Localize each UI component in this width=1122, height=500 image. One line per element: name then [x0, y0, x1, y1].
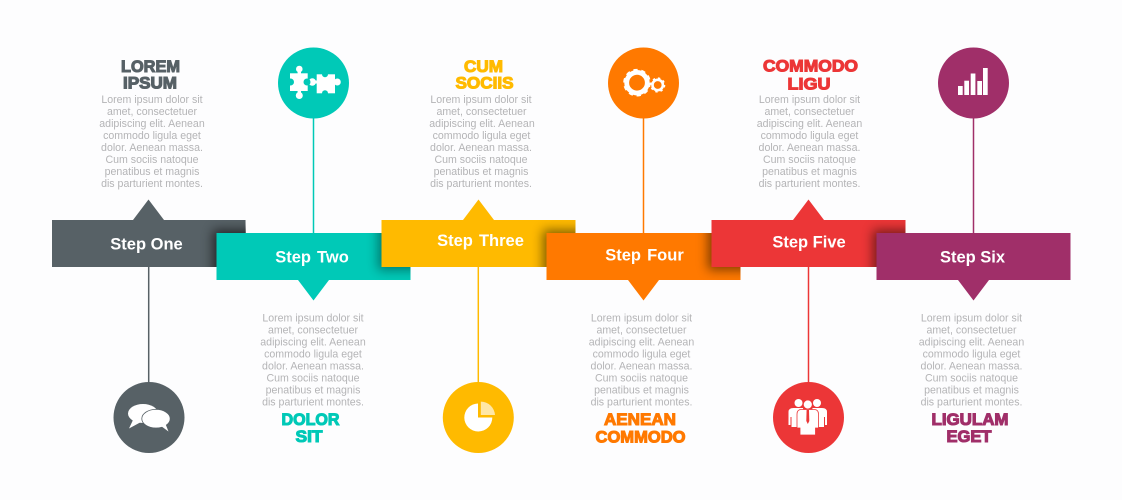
text block: cum sociis: dolor. Aenean massa. [430, 142, 532, 154]
text block: dolor sit: Lorem ipsum dolor sit [262, 312, 364, 324]
text block: lorem ipsum: commodo ligula eget [103, 130, 201, 142]
icon: team of people [773, 382, 844, 453]
text block: lorem ipsum [99, 57, 205, 190]
text block: cum sociis: Lorem ipsum dolor sit [430, 94, 532, 106]
text block: dolor sit: amet, consectetuer [268, 324, 359, 336]
text block: ligulam eget: EGET [946, 427, 992, 446]
icon: speech bubbles [114, 382, 184, 453]
text block: commodo ligu: COMMODO [763, 56, 858, 76]
text block: lorem ipsum: Cum sociis natoque [105, 154, 199, 166]
text block: cum sociis: commodo ligula eget [433, 130, 530, 142]
icon: pie chart [443, 382, 514, 453]
banner: step four: Step Four [605, 246, 684, 264]
icon: bar chart [938, 48, 1009, 118]
text block: lorem ipsum: amet, consectetuer [107, 106, 198, 118]
text block: dolor sit: penatibus et magnis [266, 384, 360, 396]
icon: puzzle pieces [278, 48, 349, 118]
text block: cum sociis: CUM [464, 57, 503, 76]
text block: ligulam eget: dis parturient montes. [921, 396, 1022, 408]
text block: cum sociis: amet, consectetuer [436, 106, 527, 118]
connector line: step three [477, 262, 479, 385]
text block: dolor sit: DOLOR [282, 410, 340, 429]
text block: dolor sit: Cum sociis natoque [266, 372, 360, 384]
banner: step two: Step Two [275, 248, 349, 266]
text block: dolor sit [260, 312, 366, 446]
banner: step six [876, 233, 1070, 300]
text block: ligulam eget: amet, consectetuer [926, 324, 1017, 336]
text block: lorem ipsum: Lorem ipsum dolor sit [101, 94, 203, 106]
text block: ligulam eget: adipiscing elit. Aenean [919, 336, 1024, 348]
text block: lorem ipsum: dolor. Aenean massa. [101, 142, 203, 154]
connector line: step six [972, 115, 974, 236]
text block: dolor sit: SIT [296, 427, 323, 446]
text block: commodo ligu: amet, consectetuer [764, 106, 855, 118]
connector line: step one [148, 262, 150, 385]
text block: cum sociis: Cum sociis natoque [434, 154, 528, 166]
text block: cum sociis: dis parturient montes. [430, 178, 532, 190]
text block: commodo ligu [757, 56, 862, 190]
text block: dolor sit: adipiscing elit. Aenean [260, 336, 366, 348]
banner: step three [382, 200, 576, 267]
text block: commodo ligu: commodo ligula eget [761, 130, 858, 142]
text block: cum sociis: penatibus et magnis [434, 166, 528, 178]
text block: aenean commodo: dolor. Aenean massa. [591, 360, 692, 372]
text block: dolor sit: commodo ligula eget [264, 348, 362, 360]
text block: dolor sit: dis parturient montes. [262, 396, 364, 408]
text block: commodo ligu: adipiscing elit. Aenean [757, 118, 862, 130]
text block: ligulam eget: dolor. Aenean massa. [921, 360, 1022, 372]
banner: step six: Step Six [940, 248, 1006, 266]
banner: step one [52, 200, 246, 267]
connector line: step five [808, 262, 810, 385]
text block: ligulam eget: Cum sociis natoque [925, 372, 1018, 384]
text block: commodo ligu: Lorem ipsum dolor sit [759, 94, 860, 106]
text block: lorem ipsum: IPSUM [123, 74, 177, 92]
text block: commodo ligu: Cum sociis natoque [763, 154, 856, 166]
text block: aenean commodo: Cum sociis natoque [595, 372, 688, 384]
connector line: step four [642, 115, 644, 236]
connector line: step two [312, 115, 314, 236]
banner: step three: Step Three [437, 232, 524, 250]
text block: dolor sit: dolor. Aenean massa. [262, 360, 364, 372]
text block: aenean commodo: adipiscing elit. Aenean [589, 336, 694, 348]
text block: cum sociis: adipiscing elit. Aenean [429, 118, 535, 130]
text block: aenean commodo: commodo ligula eget [593, 348, 690, 360]
banner: step two [216, 233, 410, 300]
banner: step five: Step Five [772, 234, 846, 252]
text block: ligulam eget: Lorem ipsum dolor sit [921, 312, 1022, 324]
text block: cum sociis [429, 57, 535, 190]
text block: aenean commodo: Lorem ipsum dolor sit [591, 312, 692, 324]
text block: ligulam eget: LIGULAM [932, 410, 1008, 429]
text block: cum sociis: SOCIIS [456, 74, 514, 92]
text block: aenean commodo: AENEAN [604, 410, 676, 429]
text block: ligulam eget: commodo ligula eget [923, 348, 1020, 360]
text block: aenean commodo [589, 312, 694, 446]
text block: commodo ligu: penatibus et magnis [762, 166, 857, 178]
banner: step four [546, 233, 740, 300]
text block: ligulam eget: penatibus et magnis [924, 384, 1019, 396]
icon: gears [608, 48, 679, 118]
text block: lorem ipsum: adipiscing elit. Aenean [99, 118, 205, 130]
banner: step five [712, 200, 906, 267]
text block: aenean commodo: COMMODO [596, 428, 686, 446]
text block: aenean commodo: dis parturient montes. [591, 396, 692, 408]
text block: lorem ipsum: LOREM [121, 57, 180, 76]
text block: commodo ligu: LIGU [788, 74, 830, 94]
text block: lorem ipsum: dis parturient montes. [101, 178, 203, 190]
banner: step one: Step One [110, 236, 183, 254]
text block: ligulam eget [919, 312, 1024, 446]
text block: aenean commodo: penatibus et magnis [594, 384, 689, 396]
text block: lorem ipsum: penatibus et magnis [105, 166, 199, 178]
text block: aenean commodo: amet, consectetuer [596, 324, 687, 336]
text block: commodo ligu: dis parturient montes. [759, 178, 860, 190]
text block: commodo ligu: dolor. Aenean massa. [759, 142, 860, 154]
